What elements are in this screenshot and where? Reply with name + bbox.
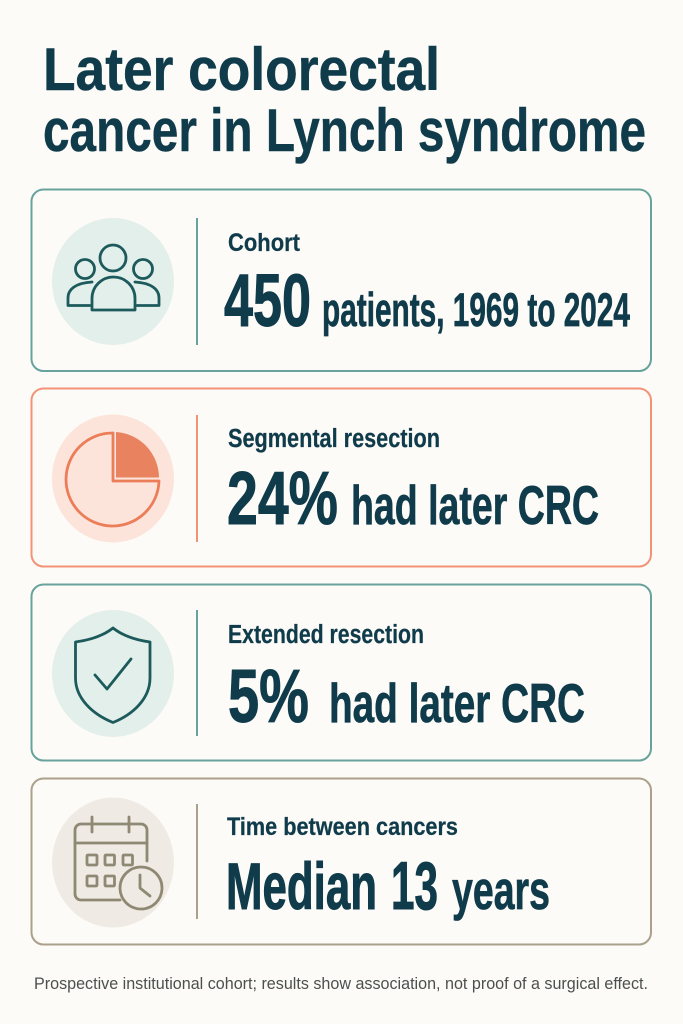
divider (196, 415, 198, 542)
stat: median 13 years: 13 (391, 848, 438, 924)
divider (196, 218, 198, 345)
divider (196, 610, 198, 736)
footnote: Prospective institutional cohort; results show association, not proof of a surgical effect. (34, 974, 648, 993)
stat: 5% had later CRC (228, 654, 585, 738)
stat: median 13 years (226, 848, 550, 924)
divider (196, 804, 198, 919)
stat: 5% had later CRC: had later CRC (329, 672, 585, 734)
panel: segmental resection (32, 388, 651, 566)
panel: extended resection (32, 584, 651, 760)
title (43, 36, 646, 164)
icon: shield with check (52, 610, 174, 737)
stat: 24% had later CRC: 24% (227, 456, 338, 540)
stat: 450 patients: 450 (224, 259, 311, 342)
label: extended resection: Extended resection (228, 621, 424, 649)
stat: 24% had later CRC (227, 456, 599, 540)
panel: cohort (32, 190, 651, 371)
stat: median 13 years: years (452, 859, 550, 921)
stat: 450 patients (224, 259, 630, 342)
icon: pie chart (52, 414, 174, 542)
label: time between cancers: Time between cancers (227, 813, 458, 841)
label: segmental resection: Segmental resection (228, 425, 440, 453)
icon: calendar with clock (52, 798, 174, 928)
label: cohort: Cohort (228, 229, 301, 257)
icon: people group (52, 218, 174, 345)
title: Later colorectal (43, 36, 440, 103)
stat: 5% had later CRC: 5% (228, 654, 309, 738)
stat: median 13 years: Median (226, 849, 377, 923)
panel: time between cancers (32, 778, 651, 944)
